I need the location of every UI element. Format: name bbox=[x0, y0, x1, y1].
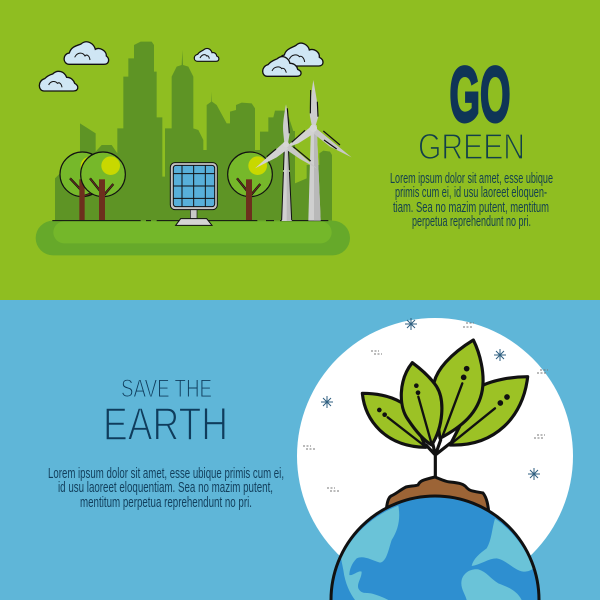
cloud left lower bbox=[39, 71, 78, 91]
cloud right back bbox=[280, 43, 323, 66]
solar panel bbox=[170, 163, 217, 225]
leaf dots bbox=[377, 366, 510, 417]
white circle backdrop bbox=[297, 318, 573, 594]
text block: save the earth description: id usu laoreet eloquentiam. Sea no mazim putent, bbox=[58, 480, 273, 496]
wind turbine small bbox=[255, 104, 318, 221]
text block: save the earth description: mentitum perpetua reprehendunt no pri. bbox=[80, 495, 252, 511]
leaf back right bbox=[433, 340, 483, 438]
cloud left top bbox=[64, 42, 109, 64]
stem bbox=[426, 440, 450, 477]
soil mound bbox=[386, 477, 489, 514]
panel: go green bbox=[0, 0, 600, 300]
cloud marks bbox=[49, 53, 305, 87]
globe bbox=[331, 496, 539, 600]
tree right bbox=[228, 152, 272, 220]
wind turbines bbox=[255, 80, 352, 221]
snowflakes and sparkles bbox=[303, 318, 548, 491]
text block: go green description bbox=[390, 171, 553, 230]
plant sprout bbox=[362, 340, 528, 477]
city skyline silhouette bbox=[55, 42, 332, 221]
cloud right front bbox=[263, 57, 301, 76]
city and energy scene bbox=[36, 42, 350, 255]
wind turbine large bbox=[283, 80, 352, 221]
heading: earth: EARTH bbox=[103, 398, 228, 450]
leaf far left bbox=[362, 393, 426, 447]
panel: save the earth bbox=[0, 300, 600, 600]
text block: save the earth description bbox=[48, 466, 284, 511]
cloud small middle bbox=[194, 48, 219, 61]
ground bbox=[36, 221, 350, 255]
leaf veins bbox=[388, 383, 495, 445]
tree left bbox=[60, 152, 105, 220]
land masses bbox=[341, 506, 533, 600]
leaf far right bbox=[450, 377, 528, 445]
leaf left center bbox=[401, 363, 442, 445]
text block: go green description: perpetua reprehendunt no pri. bbox=[412, 214, 531, 230]
heading: green: GREEN bbox=[418, 126, 525, 167]
heading: go: GO bbox=[450, 50, 510, 138]
text block: save the earth description: Lorem ipsum dolor sit amet, esse ubique primis cum ei, bbox=[48, 466, 284, 482]
heading: save the: SAVE THE bbox=[121, 375, 212, 403]
tree middle bbox=[81, 152, 125, 220]
